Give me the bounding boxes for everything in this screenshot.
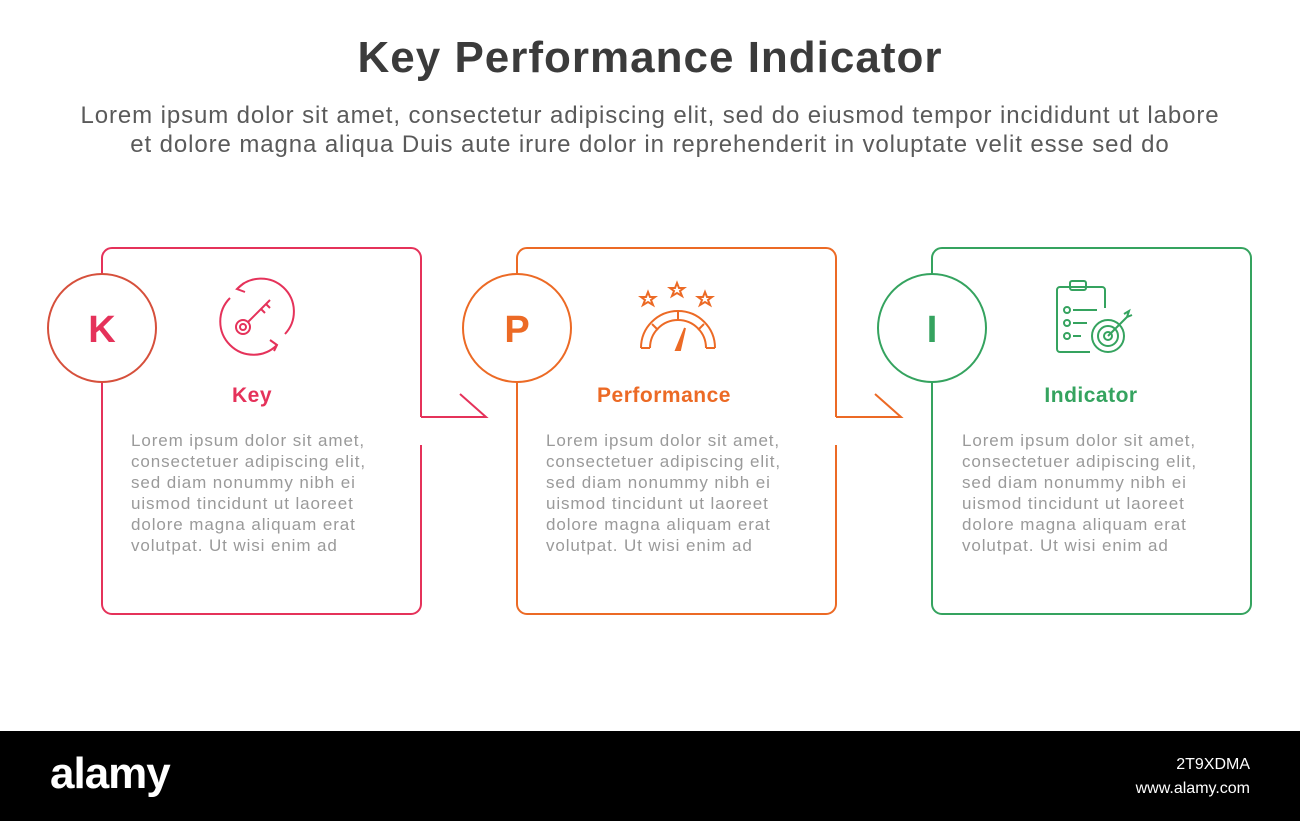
footer text: www.alamy.com: [1136, 780, 1250, 797]
text: indicator: dolore magna aliquam erat: [962, 515, 1187, 534]
panel: indicator: [932, 248, 1251, 614]
heading: indicator: Indicator: [1044, 384, 1138, 407]
text: indicator: sed diam nonummy nibh ei: [962, 473, 1187, 492]
panel: performance: [517, 248, 901, 614]
text: performance: volutpat. Ut wisi enim ad: [546, 536, 753, 555]
arrow: key to performance: [421, 394, 486, 417]
text: key: sed diam nonummy nibh ei: [131, 473, 356, 492]
text: performance: dolore magna aliquam erat: [546, 515, 771, 534]
text: indicator: consectetuer adipiscing elit,: [962, 452, 1197, 471]
text: performance: consectetuer adipiscing elit,: [546, 452, 781, 471]
text: performance: uismod tincidunt ut laoreet: [546, 494, 769, 513]
footer bar: [0, 731, 1300, 821]
text: key: [131, 431, 366, 555]
text: key: Lorem ipsum dolor sit amet,: [131, 431, 365, 450]
text: indicator: Lorem ipsum dolor sit amet,: [962, 431, 1196, 450]
heading: performance: Performance: [597, 384, 731, 407]
text: indicator: volutpat. Ut wisi enim ad: [962, 536, 1169, 555]
footer text: 2T9XDMA: [1176, 756, 1250, 773]
text: performance: Lorem ipsum dolor sit amet,: [546, 431, 780, 450]
circle I: [878, 274, 986, 382]
text: performance: sed diam nonummy nibh ei: [546, 473, 771, 492]
text: key: dolore magna aliquam erat: [131, 515, 356, 534]
text: indicator: uismod tincidunt ut laoreet: [962, 494, 1185, 513]
circle I: I: [927, 309, 937, 351]
text: key: volutpat. Ut wisi enim ad: [131, 536, 338, 555]
icon: clipboard target: [1057, 281, 1132, 352]
heading: key: Key: [232, 384, 272, 407]
circle K: K: [88, 309, 116, 351]
text: performance: [546, 431, 781, 555]
icon: key: [220, 279, 294, 355]
text: key: consectetuer adipiscing elit,: [131, 452, 366, 471]
icon: gauge with stars: [641, 283, 715, 350]
title: Key Performance Indicator: [358, 33, 942, 82]
subtitle: et dolore magna aliqua Duis aute irure dolor in reprehenderit in voluptate velit esse sed do: [130, 131, 1170, 158]
text: key: uismod tincidunt ut laoreet: [131, 494, 354, 513]
circle K: [48, 274, 156, 382]
arrow: performance to indicator: [836, 394, 901, 417]
panel: key: [102, 248, 486, 614]
circle P: [463, 274, 571, 382]
circle P: P: [504, 309, 530, 351]
subtitle: Lorem ipsum dolor sit amet, consectetur adipiscing elit, sed do eiusmod tempor incididunt ut labore: [80, 102, 1219, 129]
subtitle: [80, 102, 1219, 158]
footer text: [1136, 756, 1250, 797]
logo: alamy: [50, 749, 170, 798]
text: indicator: [962, 431, 1197, 555]
